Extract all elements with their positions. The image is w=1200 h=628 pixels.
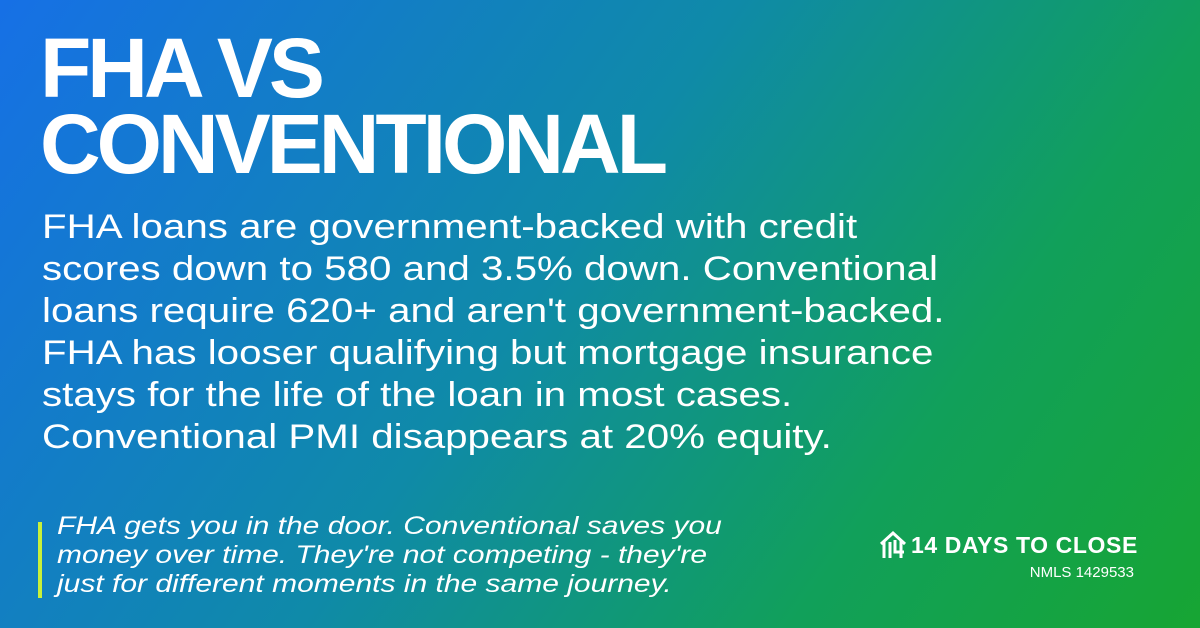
- brand name: 14 DAYS TO CLOSE: [911, 532, 1138, 558]
- body text: loans require 620+ and aren't government-backed.: [42, 292, 945, 330]
- NMLS: NMLS 1429533: [1030, 564, 1134, 581]
- body text: FHA loans are government-backed with credit: [42, 208, 857, 246]
- body text: stays for the life of the loan in most cases.: [42, 376, 792, 414]
- body text: Conventional PMI disappears at 20% equity.: [42, 418, 832, 456]
- quote text: FHA gets you in the door. Conventional saves you: [57, 512, 722, 540]
- title: FHA VS: [40, 21, 321, 115]
- body text: FHA has looser qualifying but mortgage insurance: [42, 334, 933, 372]
- quote text: just for different moments in the same journey.: [57, 570, 672, 598]
- body text: scores down to 580 and 3.5% down. Conventional: [42, 250, 938, 288]
- icon: house: [880, 531, 906, 558]
- quote text: money over time. They're not competing - they're: [57, 541, 707, 569]
- quote text: [54, 512, 722, 598]
- callout: quote: [38, 512, 722, 598]
- title: [40, 21, 666, 191]
- title: CONVENTIONAL: [40, 97, 664, 191]
- body text: [42, 208, 945, 456]
- logo: [880, 531, 1138, 581]
